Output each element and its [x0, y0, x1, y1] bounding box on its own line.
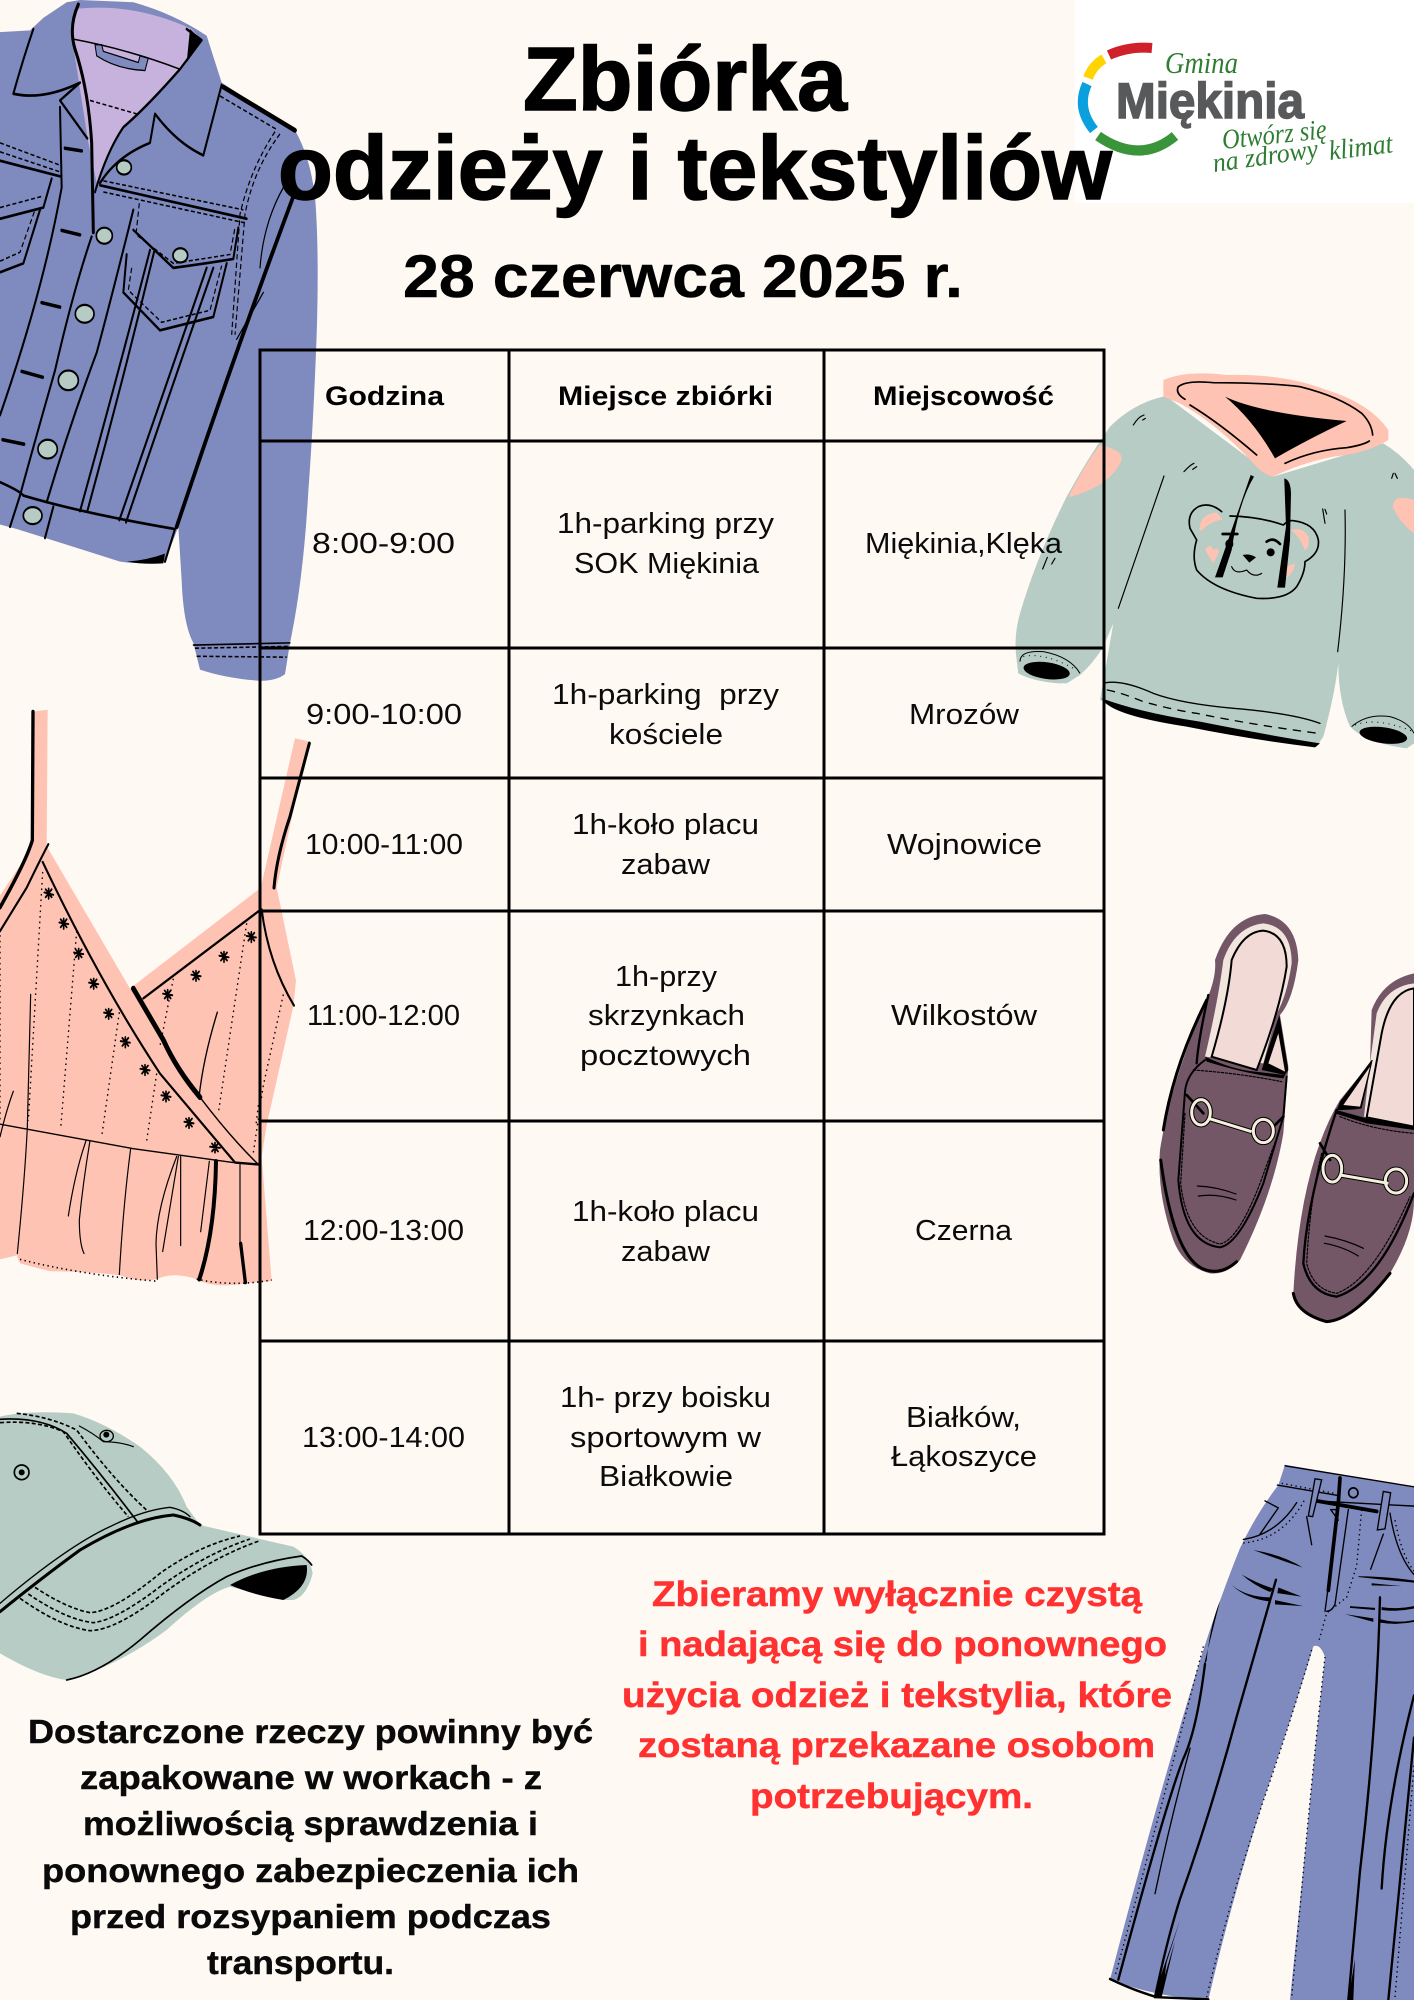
- logo: Gmina Miękinia: na zdrowy: [1211, 133, 1320, 178]
- column: hours: [302, 528, 465, 1454]
- column: meeting places: zabaw: [621, 1236, 711, 1268]
- table header: [325, 381, 1054, 411]
- column: hours: 10:00-11:00: [305, 829, 463, 861]
- illustration: mint hoodie with bear: [1016, 373, 1414, 748]
- column: localities: Łąkoszyce: [891, 1441, 1037, 1473]
- illustration: blue jeans: [1110, 1465, 1414, 2000]
- column: hours: 13:00-14:00: [302, 1422, 465, 1454]
- red notice text: zostaną przekazane osobom: [638, 1726, 1155, 1765]
- column: hours: 9:00-10:00: [306, 699, 462, 731]
- right shoe: [1293, 973, 1414, 1322]
- column: meeting places: zabaw: [621, 849, 711, 881]
- left shoe: [1159, 914, 1298, 1273]
- illustration: peach camisole top: [0, 710, 309, 1285]
- logo: Gmina Miękinia: klimat: [1327, 128, 1395, 167]
- column: hours: 11:00-12:00: [307, 1000, 460, 1032]
- packing instructions text: ponownego zabezpieczenia ich: [42, 1852, 579, 1889]
- column: meeting places: SOK Miękinia: [574, 548, 760, 580]
- red notice text: [622, 1575, 1172, 1816]
- illustration: denim jacket: [0, 0, 318, 681]
- column: localities: Wilkostów: [891, 1000, 1038, 1032]
- column: hours: 8:00-9:00: [312, 528, 455, 560]
- red notice text: użycia odzież i tekstylia, które: [622, 1676, 1172, 1715]
- schedule table: [260, 350, 1104, 1534]
- title: odzieży i tekstyliów: [278, 119, 1113, 219]
- column: localities: Białków,: [906, 1402, 1021, 1434]
- red notice text: i nadającą się do ponownego: [638, 1625, 1167, 1664]
- packing instructions text: Dostarczone rzeczy powinny być: [28, 1713, 593, 1750]
- logo: Gmina Miękinia: [1075, 0, 1414, 203]
- column: meeting places: Białkowie: [599, 1461, 733, 1493]
- column: meeting places: pocztowych: [580, 1040, 751, 1072]
- column: meeting places: kościele: [609, 719, 723, 751]
- title: Zbiórka: [523, 30, 848, 130]
- logo: Gmina Miękinia: Miękinia: [1116, 73, 1305, 129]
- column: localities: Mrozów: [909, 699, 1020, 731]
- illustration: baseball cap: [0, 1412, 313, 1680]
- red notice text: Zbieramy wyłącznie czystą: [652, 1575, 1143, 1614]
- column: meeting places: 1h-koło placu: [572, 809, 759, 841]
- column: localities: Czerna: [915, 1215, 1013, 1247]
- date heading: 28 czerwca 2025 r.: [403, 243, 963, 310]
- column: localities: Miękinia,Klęka: [865, 528, 1063, 560]
- title: [278, 30, 1113, 219]
- logo: Gmina Miękinia: Otwórz się: [1220, 114, 1328, 156]
- logo: Gmina Miękinia: Gmina: [1165, 45, 1238, 80]
- column: meeting places: 1h-parking przy: [557, 508, 775, 540]
- column: meeting places: [552, 508, 780, 1493]
- packing instructions text: możliwością sprawdzenia i: [83, 1805, 538, 1842]
- packing instructions text: [28, 1713, 593, 1981]
- column: meeting places: skrzynkach: [588, 1000, 745, 1032]
- column: meeting places: 1h-parking przy: [552, 679, 780, 711]
- table header: Godzina: [325, 381, 445, 411]
- packing instructions text: przed rozsypaniem podczas: [70, 1898, 551, 1935]
- column: hours: 12:00-13:00: [303, 1215, 464, 1247]
- red notice text: potrzebującym.: [750, 1777, 1033, 1816]
- illustration: loafers: [1159, 914, 1414, 1322]
- column: meeting places: 1h-przy: [615, 961, 718, 993]
- column: localities: Wojnowice: [887, 829, 1042, 861]
- packing instructions text: zapakowane w workach - z: [80, 1759, 542, 1796]
- column: meeting places: 1h-koło placu: [572, 1196, 759, 1228]
- table header: Miejsce zbiórki: [558, 381, 773, 411]
- column: localities: [865, 528, 1063, 1473]
- table grid: [260, 350, 1104, 1534]
- table header: Miejscowość: [873, 381, 1054, 411]
- packing instructions text: transportu.: [207, 1944, 394, 1981]
- column: meeting places: 1h- przy boisku: [560, 1382, 771, 1414]
- column: meeting places: sportowym w: [570, 1422, 762, 1454]
